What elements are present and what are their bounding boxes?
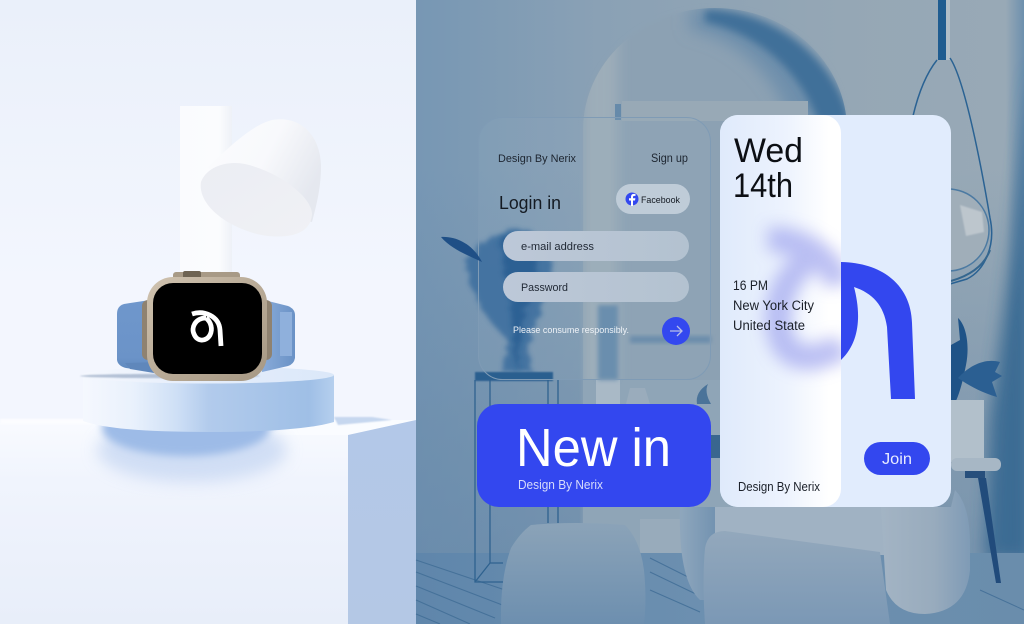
brand label: Design By Nerix (498, 153, 576, 165)
pouf (501, 523, 646, 624)
glass strip (720, 115, 842, 507)
join button (864, 442, 930, 475)
wire shelf stand (475, 380, 558, 582)
sign up link: Sign up (651, 153, 688, 165)
arrow button (662, 317, 690, 345)
login heading: Login in (499, 193, 561, 213)
new in heading: New in (516, 418, 671, 478)
armchair (680, 490, 970, 624)
join button: Join (882, 451, 912, 468)
date heading: 14th (733, 167, 793, 205)
floor (416, 553, 1024, 624)
event details: 16 PM (733, 278, 768, 293)
right plant (951, 318, 1002, 410)
event card brand label: Design By Nerix (738, 480, 821, 494)
password field: Password (521, 282, 568, 294)
event details: United State (733, 318, 805, 333)
panel: product photo with watch (0, 0, 416, 624)
watch screen (153, 283, 262, 374)
blue logo shape (841, 262, 915, 399)
facebook button (616, 184, 690, 214)
frosted background reflections (466, 230, 711, 381)
arched wall niche (583, 8, 850, 560)
watch strap (117, 300, 295, 373)
wall lamp and mirror (907, 0, 992, 284)
facebook button: Facebook (641, 195, 680, 206)
panel: event card (720, 115, 951, 507)
event details: New York City (733, 298, 814, 313)
email field (503, 231, 689, 261)
date heading (733, 132, 803, 205)
white pillar (180, 106, 224, 272)
right planter and side table (951, 400, 1001, 583)
vase on shelf (596, 380, 711, 404)
icon: facebook (626, 192, 638, 206)
new in subtitle: Design By Nerix (518, 478, 604, 492)
email field: e-mail address (521, 241, 595, 253)
round pedestal (80, 366, 334, 432)
panel: new in card (477, 404, 711, 507)
disc shadow (94, 425, 290, 488)
wall beneath cards (583, 380, 847, 553)
panel: blue-toned room photo (416, 0, 1024, 624)
watch case (173, 272, 240, 277)
event details (733, 278, 814, 333)
disclaimer text: Please consume responsibly. (513, 325, 629, 335)
date heading: Wed (734, 132, 803, 170)
plinth block (0, 417, 416, 624)
left plant leaf (441, 237, 482, 262)
password field (503, 272, 689, 302)
panel: glass login card (441, 117, 711, 381)
blurred logo (768, 240, 842, 357)
watch logo (192, 313, 221, 346)
smartwatch (117, 271, 295, 381)
lamp shade (201, 119, 321, 236)
